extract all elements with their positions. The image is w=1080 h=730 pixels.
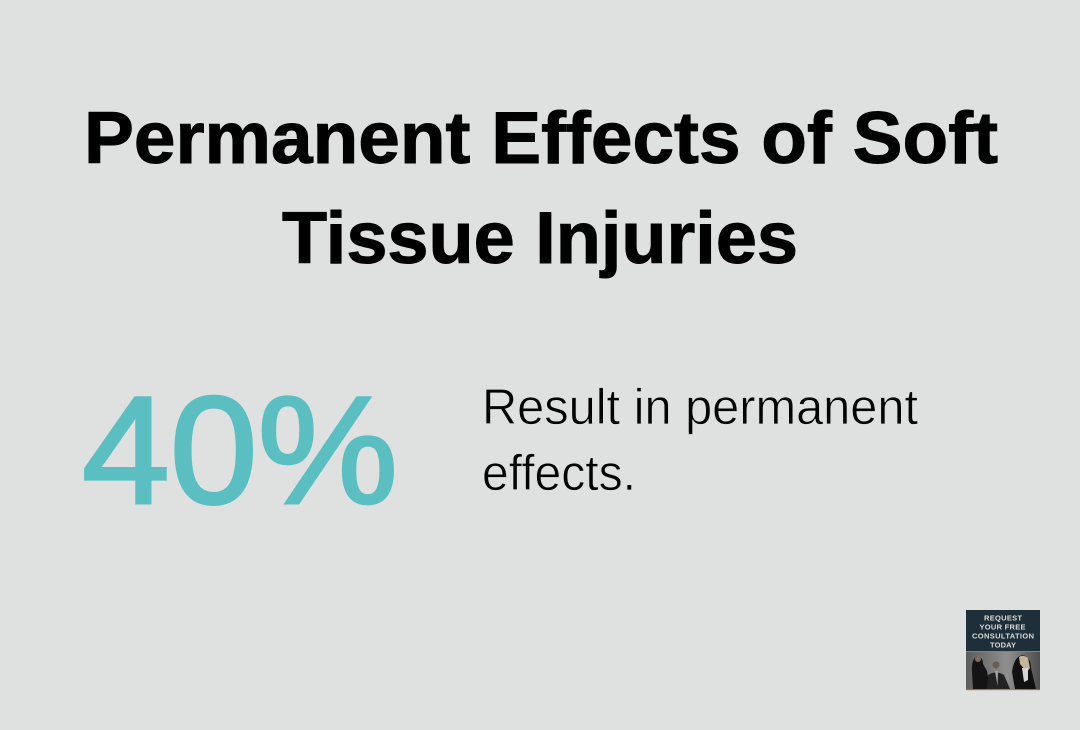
title <box>84 98 998 279</box>
badge text: YOUR FREE <box>980 622 1026 632</box>
title: Permanent Effects of Soft <box>84 98 998 179</box>
description text: Result in permanent <box>482 379 918 435</box>
badge text <box>972 614 1034 650</box>
consultation badge <box>966 610 1040 690</box>
description text <box>482 379 918 501</box>
badge text: CONSULTATION <box>972 632 1034 640</box>
badge text: TODAY <box>990 640 1016 650</box>
title: Tissue Injuries <box>282 198 798 279</box>
badge photo <box>966 651 1040 690</box>
statistic: 40%: 40% <box>82 365 398 536</box>
badge text: REQUEST <box>984 614 1022 622</box>
description text: effects. <box>482 445 636 501</box>
